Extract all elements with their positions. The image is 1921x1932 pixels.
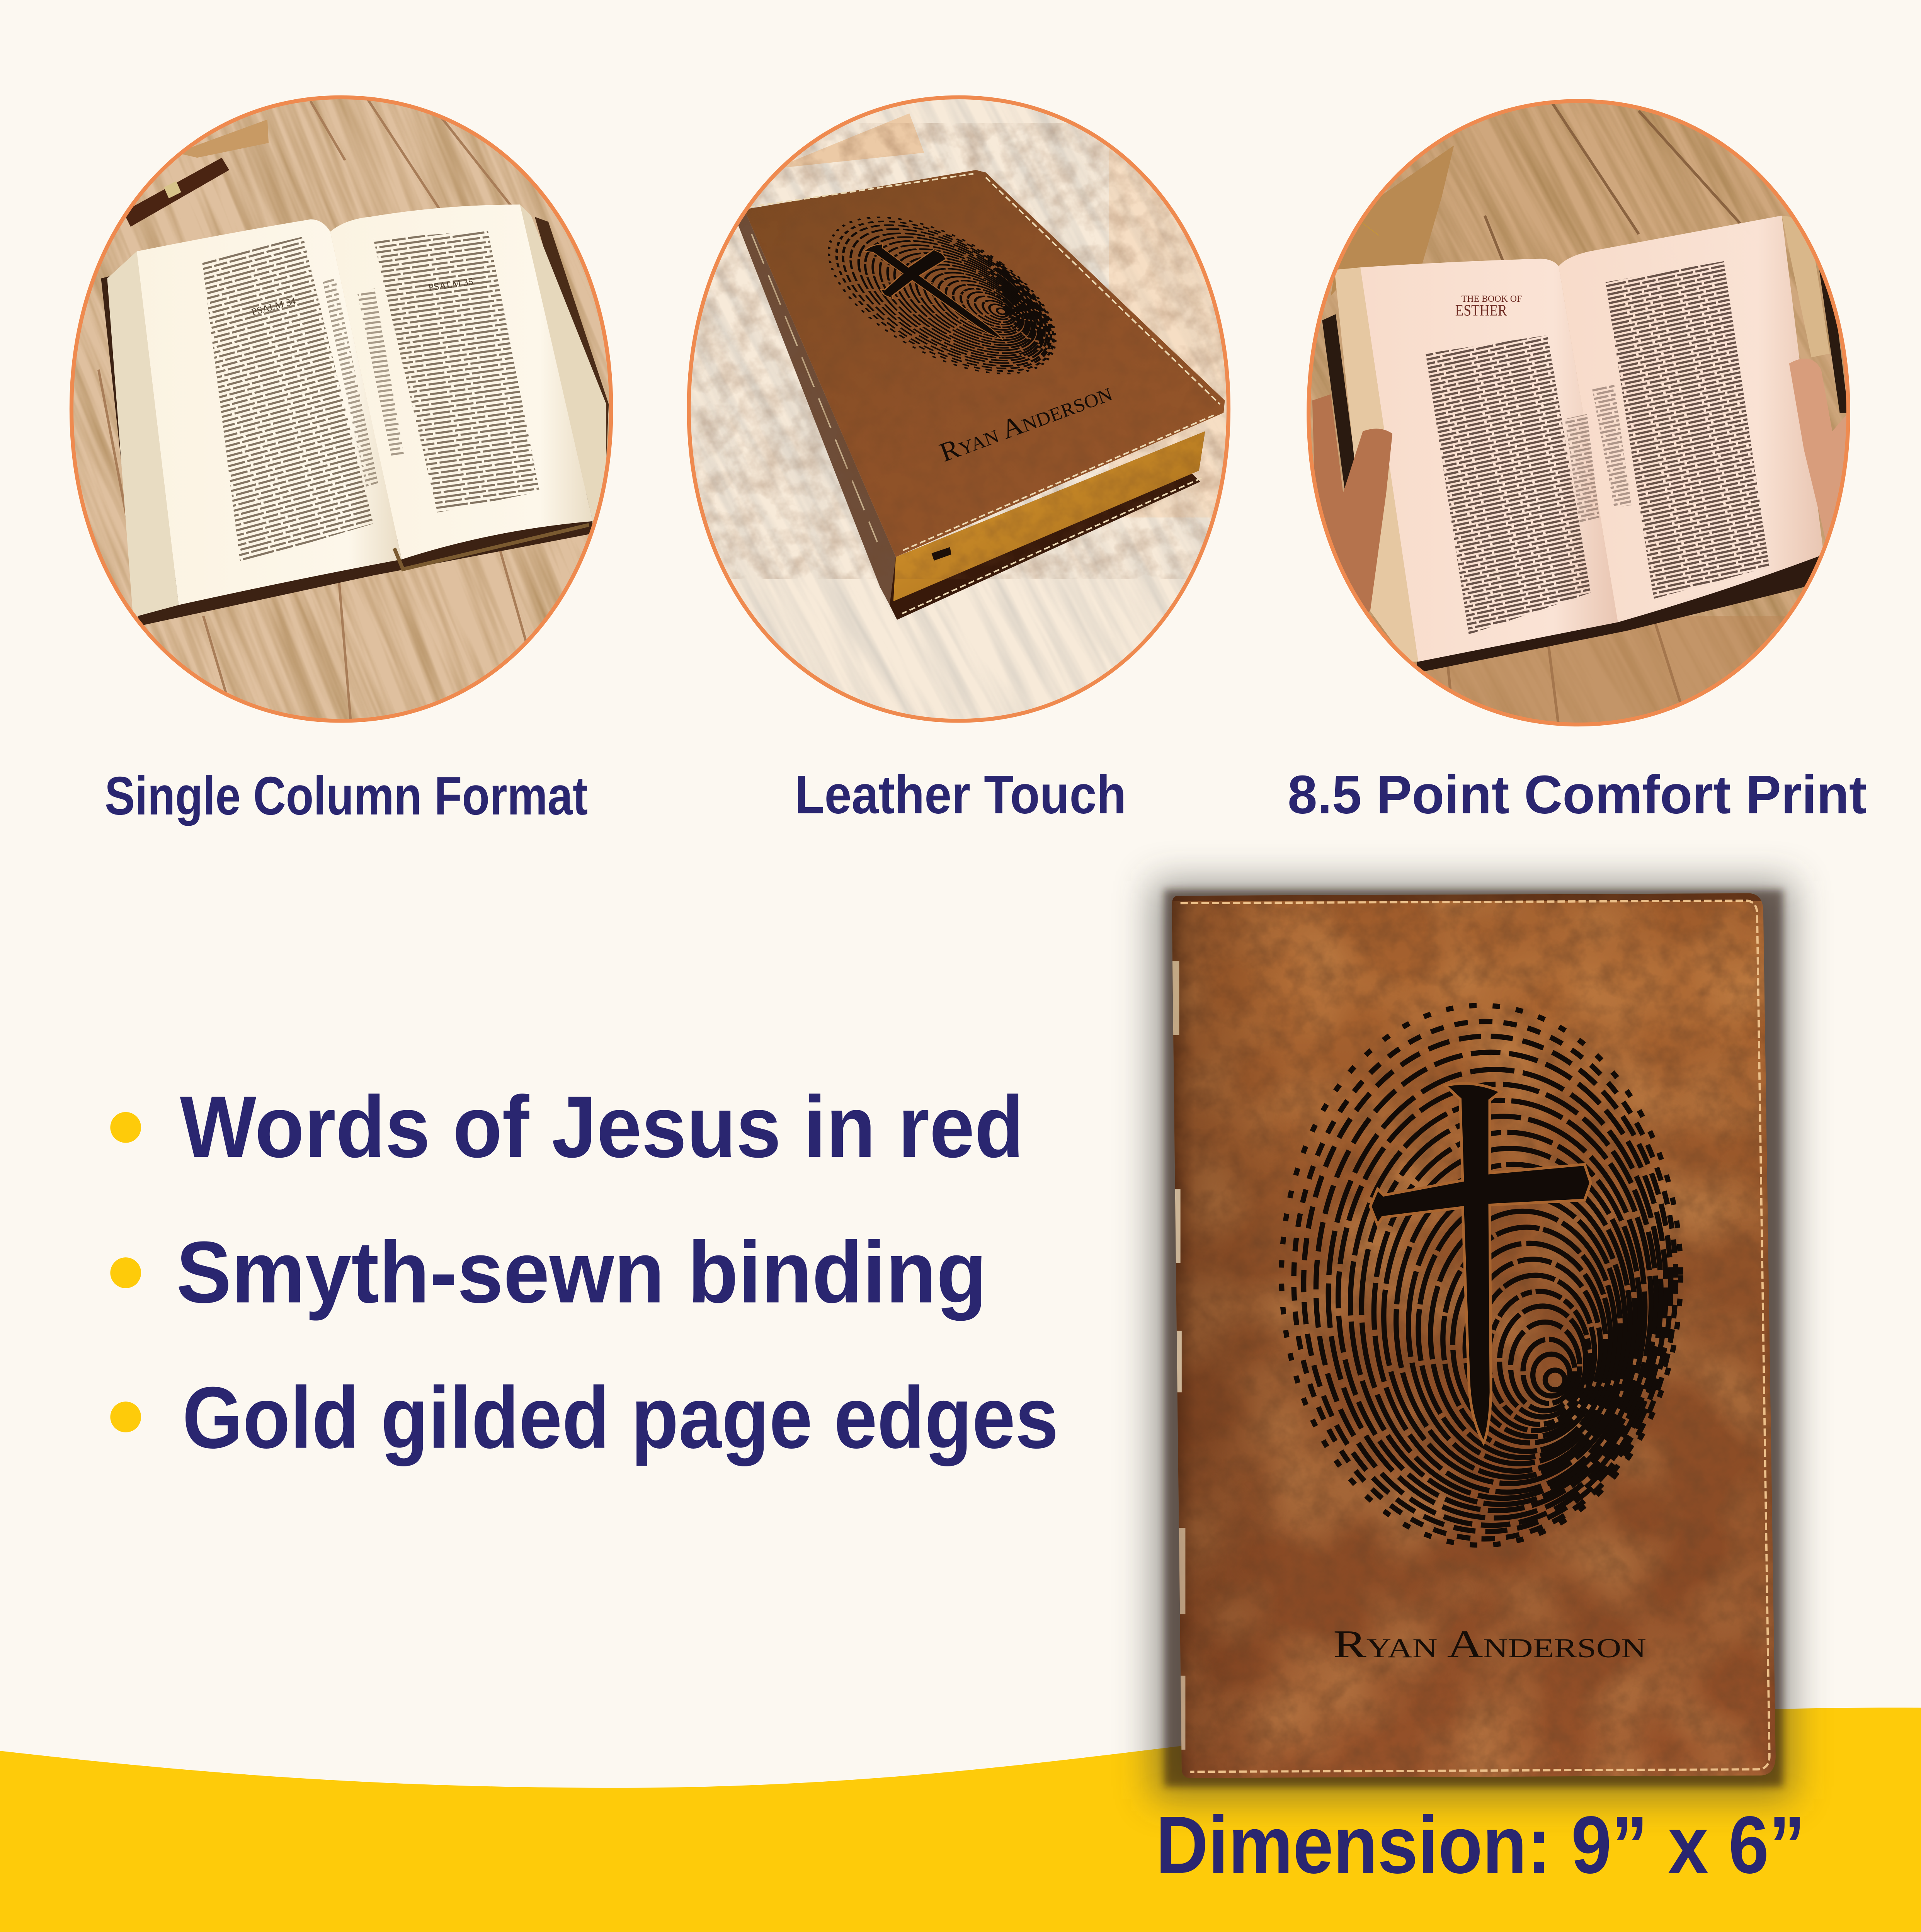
caption: single column format: Single Column Format	[105, 765, 588, 826]
book title in photo: ESTHER	[1455, 301, 1507, 319]
caption: comfort print: 8.5 Point Comfort Print	[1288, 764, 1867, 825]
bullet 1	[110, 1112, 141, 1143]
feature list	[110, 1078, 1058, 1466]
fingerprint cross emboss	[1281, 1005, 1681, 1545]
hand right	[1789, 359, 1848, 554]
feature: words of jesus: Words of Jesus in red	[180, 1078, 1024, 1175]
fingerprint on tilted book	[786, 192, 1098, 399]
photo: leather bible lying on white wood	[687, 95, 1230, 723]
caption: leather touch: Leather Touch	[795, 764, 1126, 825]
book title in photo: THE BOOK OF	[1462, 294, 1522, 304]
photo: hands holding open bible	[829, 0, 1921, 1163]
large leather bible cover	[1152, 881, 1793, 1799]
engraved name: Ryan Anderson	[1333, 1622, 1646, 1666]
bullet 2	[110, 1257, 141, 1288]
hand left	[1312, 394, 1392, 616]
bullet 3	[110, 1401, 141, 1432]
photo: open bible on wood with pen	[70, 95, 613, 723]
page headings in photo: PSALM 34	[250, 295, 297, 318]
feature: gold gilded edges: Gold gilded page edges	[182, 1369, 1058, 1466]
page headings in photo	[250, 276, 474, 318]
page headings in photo: PSALM 35	[427, 276, 474, 293]
engraved name on tilted book: Ryan Anderson	[936, 377, 1116, 468]
dimension label: Dimension: 9” x 6”	[1156, 1799, 1805, 1890]
yellow wave band	[0, 1708, 1921, 1932]
book title in photo	[1455, 294, 1522, 319]
stitching	[1181, 901, 1770, 1772]
feature: smyth-sewn binding: Smyth-sewn binding	[176, 1223, 987, 1321]
